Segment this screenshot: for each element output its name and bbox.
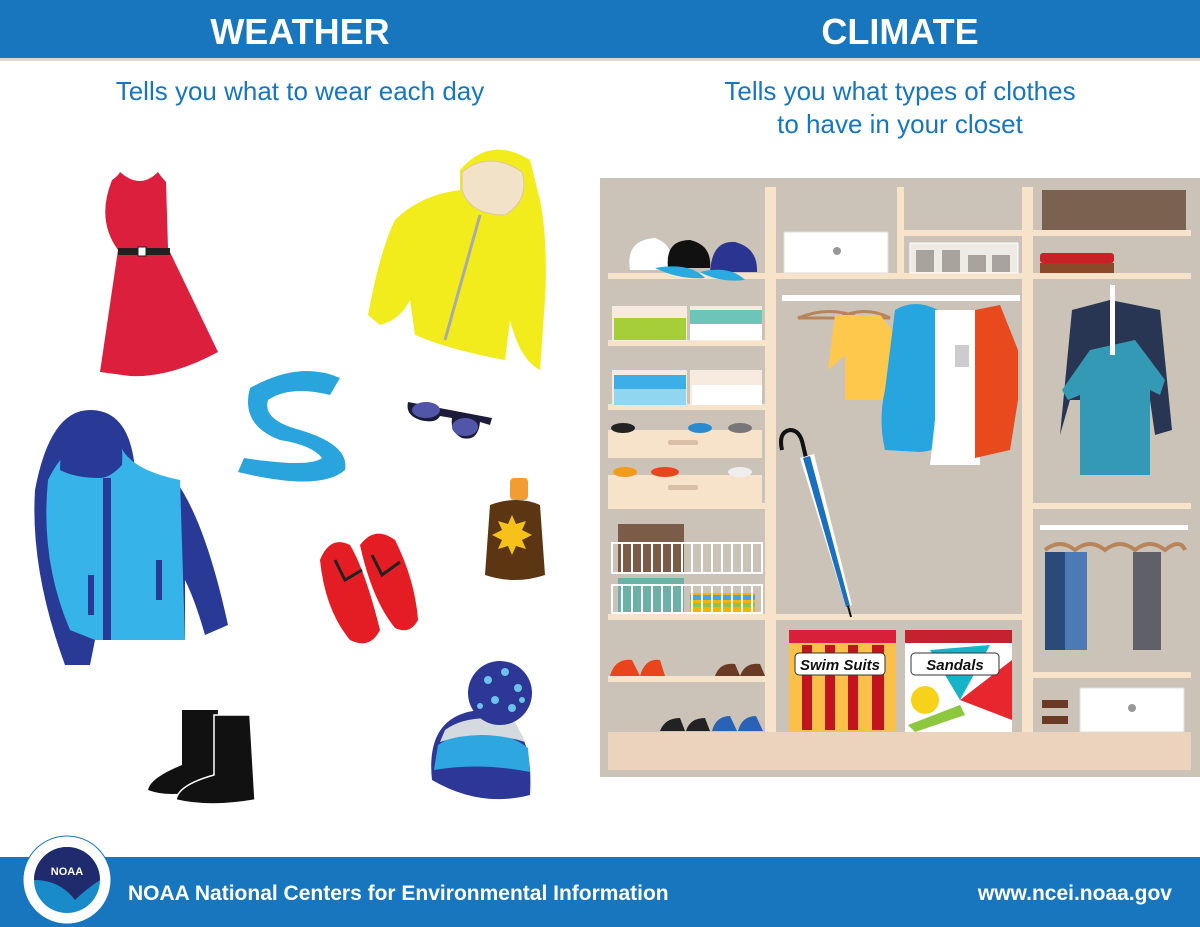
footer text: url: www.ncei.noaa.gov — [977, 882, 1172, 905]
belts — [1042, 700, 1068, 724]
brown box and folded sweaters — [1040, 190, 1186, 273]
box: swim suits: Swim Suits — [800, 657, 880, 674]
box: swim suits — [789, 630, 896, 732]
subtitle: climate: Tells you what types of clothes — [724, 76, 1076, 106]
shoes — [610, 660, 765, 731]
rod and hanging clothes — [782, 295, 1020, 465]
icon: blue jacket — [34, 410, 228, 665]
icon: sunglasses — [408, 402, 492, 439]
panel: closet — [600, 178, 1200, 777]
drawers — [608, 423, 762, 503]
white boxes — [784, 232, 1184, 732]
box: sandals — [905, 630, 1012, 732]
footer text: NOAA NCEI: NOAA National Centers for Environmental Information — [128, 882, 669, 905]
folded shirts — [612, 306, 762, 405]
jacket and shirt right — [1060, 285, 1172, 475]
subtitle: weather: Tells you what to wear each day — [116, 76, 484, 106]
heading: climate: CLIMATE — [821, 11, 979, 52]
icon: flip flops — [320, 534, 418, 643]
icon: noaa logo — [23, 836, 111, 924]
header bar — [0, 0, 1200, 61]
footer bar — [0, 857, 1200, 927]
icon: scarf — [238, 371, 345, 482]
icon: beanie — [431, 661, 532, 799]
caps — [629, 238, 757, 281]
icon: yellow jacket — [368, 150, 546, 370]
icon: red dress — [100, 172, 218, 376]
rod and pants — [1040, 525, 1188, 650]
closet shelves — [608, 230, 1191, 770]
icon: sunscreen — [485, 478, 545, 580]
baskets — [612, 524, 762, 614]
subtitle: climate — [724, 76, 1076, 139]
icon: boots — [148, 710, 255, 804]
icon: noaa logo: NOAA — [51, 866, 83, 878]
heading: weather: WEATHER — [210, 11, 390, 52]
umbrella — [781, 430, 852, 617]
box: sandals: Sandals — [926, 657, 984, 674]
closet posts — [765, 187, 1033, 770]
subtitle: climate: to have in your closet — [777, 109, 1024, 139]
